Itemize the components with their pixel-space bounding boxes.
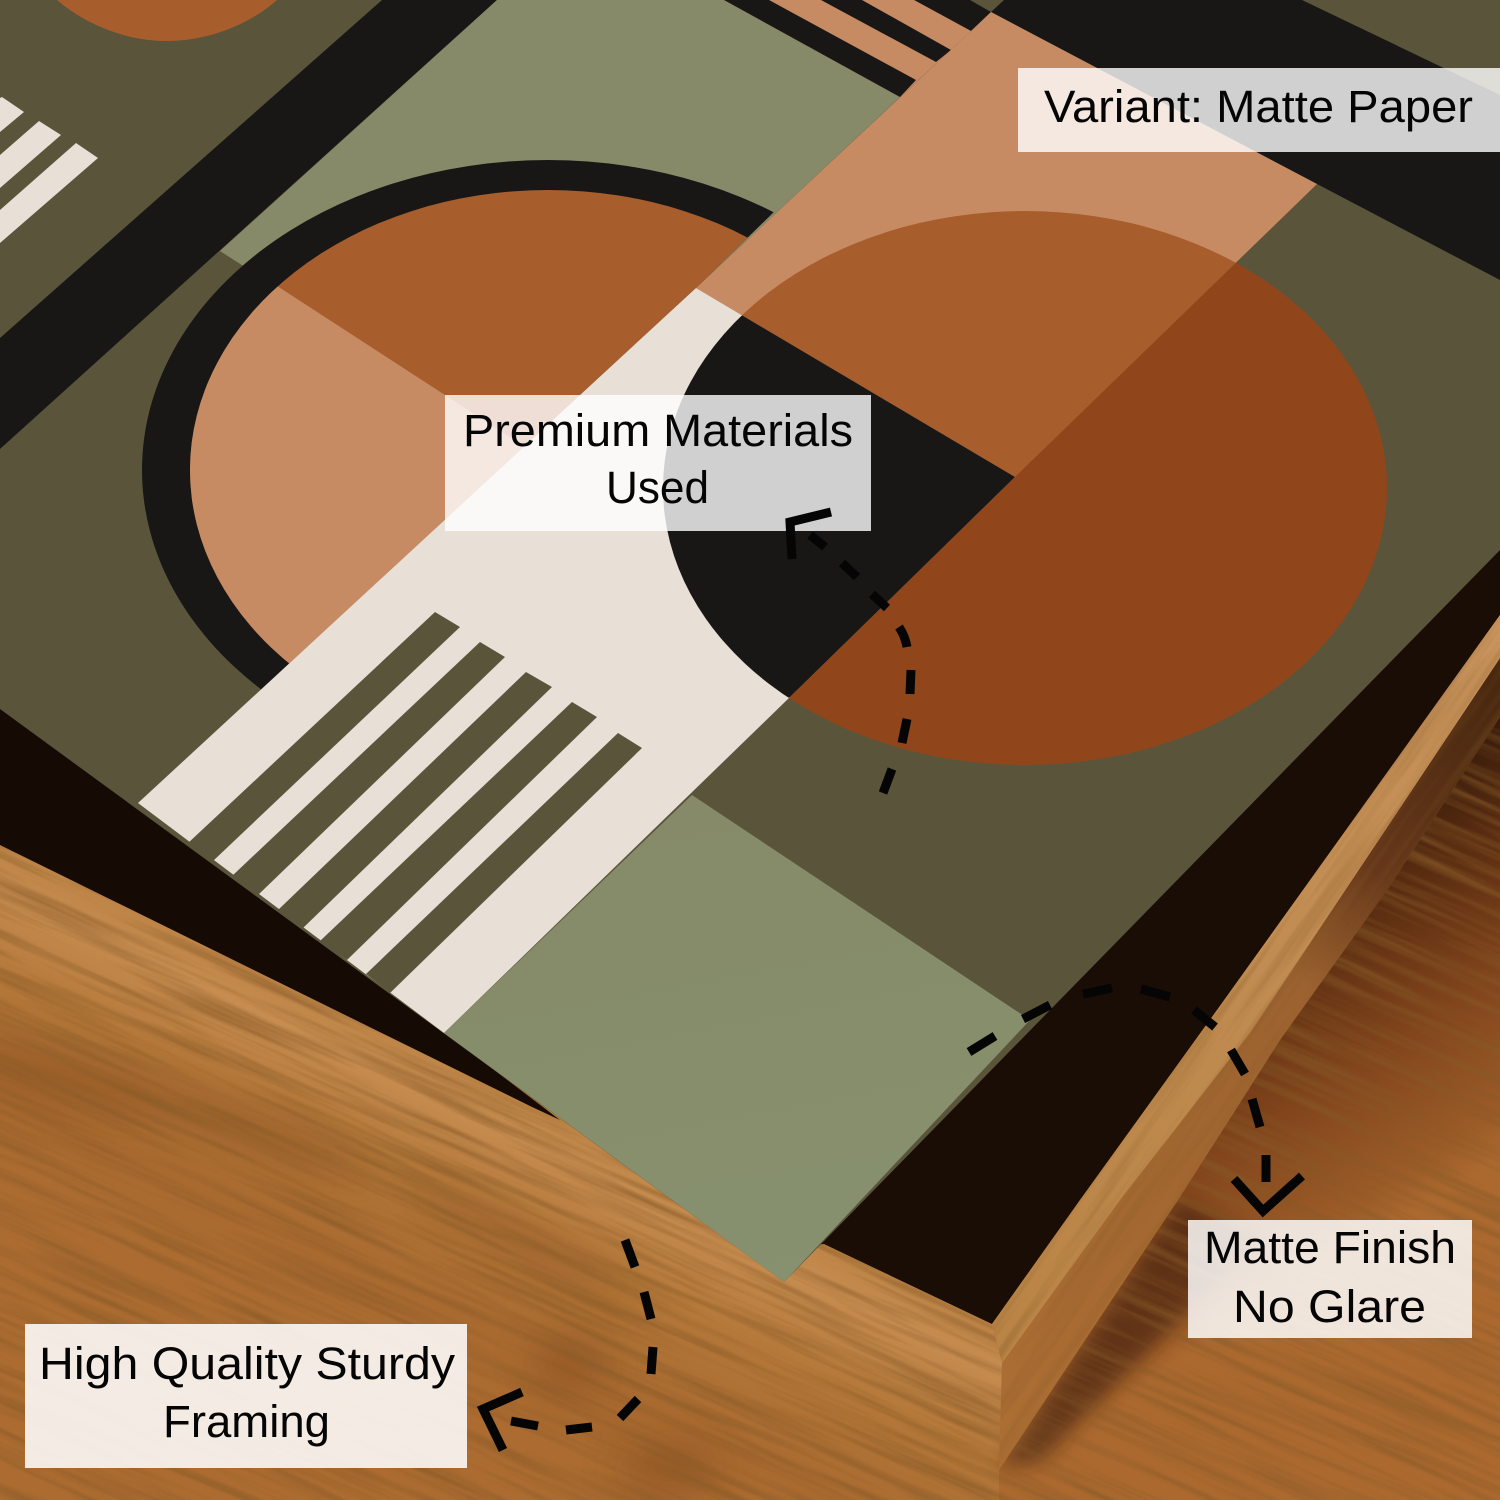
arrow: to Matte Finish label [969,988,1302,1211]
right circle quadrants [663,211,1387,765]
peach diagonal block [696,12,1317,477]
label: High Quality Sturdy Framing: Framing [163,1396,330,1447]
top black block [914,0,1500,280]
black diagonal band [0,0,497,449]
label: Variant: Matte Paper: Variant: Matte Paper [1044,81,1473,132]
label: Premium Materials Used: Premium Materials [463,405,853,456]
cream diagonal block [138,288,1015,1033]
frame right rail [992,615,1500,1470]
label: Matte Finish No Glare: No Glare [1233,1281,1426,1332]
frame interior shadow [0,530,1500,1324]
upper green block [220,0,900,447]
arrow: to Premium Materials label [790,512,911,793]
label: Matte Finish No Glare [1188,1220,1472,1338]
cream stripes top left [0,97,98,243]
arrow: to High Quality Sturdy Framing label [483,1240,653,1450]
label: High Quality Sturdy Framing: High Quality Sturdy [39,1338,456,1389]
label: Variant: Matte Paper [1018,68,1500,152]
wooden table surface [0,717,1500,1500]
label: High Quality Sturdy Framing [25,1324,467,1468]
label: Matte Finish No Glare: Matte Finish [1204,1222,1456,1273]
label: Premium Materials Used: Used [606,462,709,513]
lower green block [444,795,1030,1282]
orange half circle top left [57,0,277,41]
left circle with black ring [142,160,774,690]
olive stripes on cream [187,612,642,993]
label: Premium Materials Used [445,395,871,531]
top peach stripes with black bars [724,0,971,97]
